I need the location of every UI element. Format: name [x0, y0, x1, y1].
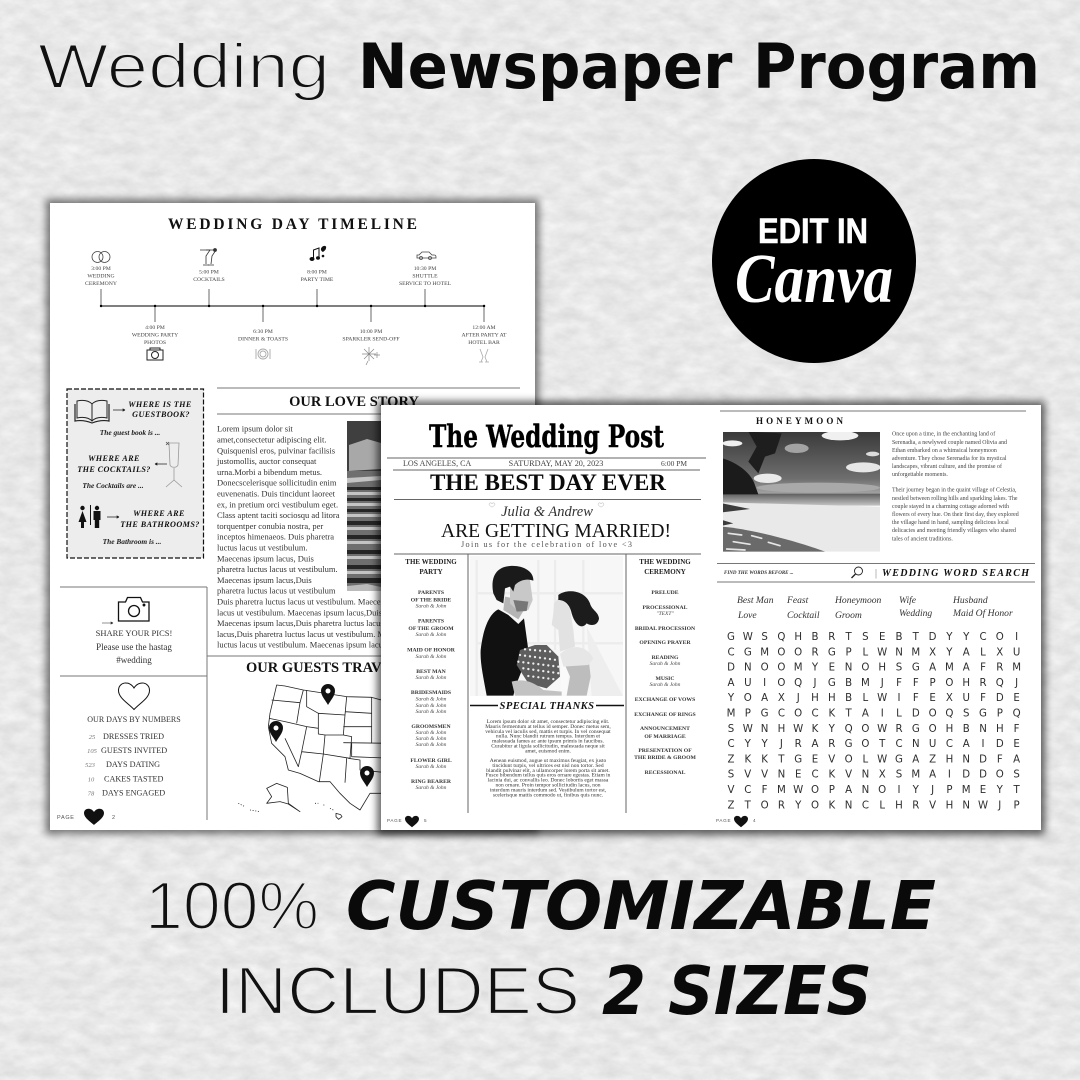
timeline labels top: SERVICE TO HOTEL: [399, 281, 452, 287]
tagline: 100% customizable: CUSTOMIZABLE: [346, 867, 936, 945]
timeline labels bottom: AFTER PARTY AT: [461, 332, 507, 338]
text: honeymoon story: landscapes, vibrant culture, and the promise of: [892, 463, 1002, 470]
word list: Best Man: [737, 595, 774, 606]
text: join us: Join us for the celebration of love <3: [461, 540, 632, 549]
text: special thanks body: Curabitur at ligula sollicitudin, malesuada neque sit: [491, 744, 605, 750]
headline: the best day ever: THE BEST DAY EVER: [430, 470, 667, 496]
column: wedding party: Sarah & John: [416, 654, 447, 660]
arrow: to share: [102, 622, 113, 624]
word search grid: GWSQHBRTSEBTDYYCOI: [727, 632, 1018, 643]
panel: share your pics: [96, 598, 172, 665]
icon: map pin texas: [360, 766, 374, 787]
icon: cocktails: [200, 248, 216, 265]
text: special thanks body: Mauris fermentum at tellus id semper. Donec metus sem,: [485, 723, 611, 730]
text: special thanks body: Lorem ipsum dolor sit amet, consectetur adipiscing elit.: [487, 719, 610, 725]
timeline labels bottom: DINNER & TOASTS: [238, 336, 288, 342]
heading: our love story: OUR LOVE STORY: [289, 394, 419, 410]
panel: left newspaper page: [46, 199, 539, 834]
text: love story body: Maecenas ipsum lacus, Duis: [217, 553, 314, 563]
column: wedding ceremony: THE BRIDE & GROOM: [634, 755, 697, 761]
heading: wedding day timeline: WEDDING DAY TIMELINE: [168, 216, 417, 233]
timeline labels top: SHUTTLE: [412, 274, 438, 280]
timeline labels top: CEREMONY: [85, 281, 117, 287]
footer: page 2: [57, 809, 116, 825]
column: wedding ceremony: OPENING PRAYER: [639, 640, 691, 646]
word search grid: SWNHWKYQOWRGOHBNHF: [728, 724, 1020, 735]
column: wedding ceremony: BRIDAL PROCESSION: [635, 626, 696, 632]
word search grid: VCFMWOPANOIYJPMEYT: [728, 785, 1020, 796]
column: wedding party: [405, 558, 457, 791]
timeline labels bottom: HOTEL BAR: [468, 340, 500, 346]
subhead: are getting married: ARE GETTING MARRIED!: [441, 520, 671, 542]
column: wedding ceremony: "TEXT": [656, 611, 674, 617]
footer: page 2: PAGE: [57, 815, 75, 821]
text: honeymoon story: tales of ancient traditions.: [892, 535, 953, 542]
word search grid: ZTORYOKNCLHRVHNWJP: [728, 800, 1020, 811]
text: love story body: amet,consectetur adipiscing elit.: [217, 434, 327, 444]
tagline: includes 2 sizes: INCLUDES: [215, 953, 580, 1029]
text: love story body: Class aptent taciti sociosqu ad litora: [217, 510, 340, 520]
column: wedding ceremony: EXCHANGE OF RINGS: [634, 712, 696, 718]
word list: Wife: [899, 595, 917, 606]
footer: page 5: 5: [424, 818, 427, 823]
text: love story body: [216, 424, 415, 650]
icon: champagne toast: [479, 349, 489, 362]
text: special thanks body: nulla. Nunc blandit rutrum tempus. Interdum et: [496, 734, 601, 740]
column: wedding party: Sarah & John: [416, 730, 447, 736]
tagline: includes 2 sizes: [215, 952, 872, 1030]
map: united states: [238, 684, 393, 819]
word list: Maid Of Honor: [952, 608, 1013, 619]
tagline: 100% customizable: 100%: [145, 868, 319, 944]
timeline labels top: 5:00 PM: [199, 270, 219, 276]
word list: Cocktail: [787, 610, 820, 621]
column: wedding party: PARENTS: [418, 590, 444, 596]
word search grid: CYYJRARGOTCNUCAIDE: [727, 739, 1020, 750]
text: special thanks body: vehicula vel iaculis sed, mattis et turpis. In vel consequat: [485, 729, 611, 735]
column: wedding ceremony: RECESSIONAL: [645, 770, 686, 776]
list: day stats: DAYS ENGAGED: [102, 788, 165, 798]
column: wedding party: RING BEARER: [411, 779, 452, 785]
column: wedding ceremony: THE WEDDING: [639, 558, 691, 566]
icon: music notes: [310, 246, 326, 261]
footer: page 5: PAGE: [387, 818, 402, 823]
column: wedding party: PARENTS: [418, 618, 444, 624]
title: Newspaper Program: [358, 30, 1040, 103]
timeline labels top: 8:00 PM: [307, 270, 327, 276]
column: wedding party: BEST MAN: [416, 669, 447, 675]
panel: right newspaper spread: [377, 401, 1045, 835]
column: wedding party: Sarah & John: [416, 632, 447, 638]
column: wedding ceremony: MUSIC: [656, 676, 674, 682]
footer: page 4: [716, 816, 756, 827]
timeline labels bottom: SPARKLER SEND-OFF: [342, 336, 400, 342]
word list: [737, 595, 1013, 621]
icon: camera: [118, 598, 149, 621]
text: special thanks body: interdum mauris interdum sed. Vestibulum tortor est,: [490, 787, 607, 793]
word search grid: ZKKTGEVOLWGAZHNDFA: [728, 754, 1020, 765]
column: wedding party: Sarah & John: [416, 785, 447, 791]
text: share instructions: Please use the hastag: [96, 642, 172, 652]
icon: champagne flute: [166, 442, 182, 487]
column: wedding party: THE WEDDING: [405, 558, 457, 566]
column: wedding ceremony: PRESENTATION OF: [638, 748, 692, 754]
timeline labels bottom: WEDDING PARTY: [132, 332, 178, 338]
icon: photo camera: [147, 348, 163, 360]
word search grid: SVVNECKVNXSMAIDDOS: [728, 770, 1020, 781]
text: bathrooms question: WHERE ARE: [133, 509, 185, 518]
column: wedding ceremony: EXCHANGE OF VOWS: [635, 697, 695, 703]
icon: restroom figures: [78, 505, 100, 528]
chart: timeline axis and ticks: [101, 289, 484, 322]
panel: where is guide: [67, 389, 204, 558]
text: honeymoon story: Once upon a time, in the enchanting land of: [892, 431, 995, 438]
text: bathrooms question: [103, 509, 200, 546]
timeline labels top: PARTY TIME: [301, 277, 334, 283]
column: wedding ceremony: PRELUDE: [651, 590, 679, 596]
text: cocktails question: THE COCKTAILS?: [77, 465, 151, 474]
word search header: FIND THE WORDS BEFORE ...: [724, 571, 794, 576]
heading: honeymoon: HONEYMOON: [756, 416, 844, 426]
word search grid: [727, 632, 1021, 811]
text: special thanks body: amet, euismod enim.: [525, 748, 572, 754]
arrow: to bathrooms: [107, 516, 119, 518]
column: wedding party: PARTY: [419, 568, 443, 576]
text: bathrooms question: THE BATHROOMS?: [120, 520, 200, 529]
text: cocktails question: The Cocktails are ...: [82, 481, 144, 490]
timeline labels top: WEDDING: [87, 274, 115, 280]
icon: outline heart: [118, 683, 150, 710]
text: honeymoon story: Ethan embarked on a whimsical honeymoon: [892, 448, 997, 454]
text: honeymoon story: [892, 431, 1019, 542]
column: wedding ceremony: OF MARRIAGE: [644, 734, 686, 740]
word search grid: YOAXJHHBLWIFEXUFDE: [727, 693, 1020, 704]
list: day stats: 105: [87, 748, 98, 755]
dateline: LOS ANGELES, CA: [403, 459, 471, 468]
text: love story body: luctus lacus ut vestibulum.: [217, 542, 308, 552]
column: wedding ceremony: CEREMONY: [644, 568, 686, 576]
timeline labels bottom: 12:00 AM: [472, 325, 496, 331]
column: wedding party: Sarah & John: [416, 764, 447, 770]
text: love story body: pharetra luctus lacus ut vestibulum.: [217, 564, 338, 574]
text: guestbook question: [100, 400, 192, 437]
text: honeymoon story: nestled between rolling hills and sparkling lakes. The: [892, 496, 1018, 502]
text: love story body: Duis pharetra luctus lacus ut vestibulum. Maecenas ipsum: [217, 596, 415, 606]
word search grid: DNOOMYENOHSGAMAFRM: [727, 663, 1021, 674]
timeline labels bottom: 10:00 PM: [360, 329, 382, 335]
rule lines: love story and side columns: [60, 388, 520, 820]
text: honeymoon story: adventure. They chose Serenadia for its mystical: [892, 455, 1007, 462]
text: love story body: Donecscelerisque sollicitudin enim: [217, 478, 337, 488]
list: day stats: [85, 732, 167, 798]
icon: map pin california: [269, 721, 283, 742]
column: wedding party: GROOMSMEN: [411, 724, 451, 730]
word list: Love: [737, 610, 757, 621]
text: special thanks body: non ornare. Proin tempor sollicitudin lacus, non: [495, 782, 601, 788]
column: wedding party: Sarah & John: [416, 736, 447, 742]
text: special thanks body: malesuada fames ac ante ipsum primis in faucibus.: [492, 738, 605, 745]
text: special thanks body: [485, 719, 611, 798]
heading: special thanks: SPECIAL THANKS: [499, 701, 595, 712]
text: guestbook question: GUESTBOOK?: [132, 410, 190, 419]
word list: Honeymoon: [834, 595, 882, 606]
word list: Groom: [835, 610, 862, 621]
list: day stats: DRESSES TRIED: [103, 732, 164, 741]
text: bathrooms question: The Bathroom is ...: [103, 537, 162, 546]
word list: Wedding: [899, 608, 932, 619]
text: share instructions: SHARE YOUR PICS!: [96, 628, 172, 638]
icon: shuttle car: [417, 252, 436, 260]
subhead: julia and andrew: Julia & Andrew: [501, 504, 593, 520]
text: love story body: pharetra luctus lacus ut vestibulum: [217, 586, 336, 596]
column: wedding party: OF THE GROOM: [408, 626, 454, 632]
word search grid: CGMOORGPLWNMXYALXU: [727, 647, 1020, 658]
heading: our guests travel: OUR GUESTS TRAVEL: [246, 660, 401, 676]
column: wedding party: BRIDESMAIDS: [411, 690, 451, 696]
icon: magnifier: [852, 567, 862, 578]
text: love story body: Quisquenisl eros, pulvinar facilisis: [217, 445, 335, 455]
word search grid: AUIOQJGBMJFFPOHRQJ: [728, 678, 1018, 689]
badge: edit in canva: EDIT IN: [758, 212, 868, 251]
word search header: |: [875, 568, 877, 579]
title: [38, 30, 1040, 103]
timeline labels bottom: PHOTOS: [144, 340, 166, 346]
text: special thanks body: blandit pulvinar elit, a ullamcorper lorem porta sit amet.: [486, 768, 610, 774]
text: love story body: Maecenas ipsum lacus,Duis pharetra luctus lacus ut: [217, 618, 393, 628]
rule lines: masthead: [387, 458, 706, 813]
text: share instructions: #wedding: [116, 655, 152, 665]
word search grid: MPGCOCKTAILDOQSGPQ: [727, 708, 1021, 720]
column: wedding ceremony: ANNOUNCEMENT: [640, 726, 690, 732]
text: love story body: ex, in pretium orci vestibulum eget.: [217, 499, 338, 509]
column: wedding ceremony: PROCESSIONAL: [643, 605, 688, 611]
text: honeymoon story: unforgettable moments.: [892, 471, 948, 478]
dateline: 6:00 PM: [661, 459, 687, 468]
text: love story body: inceptos himenaeos. Duis pharetra: [217, 532, 334, 542]
text: love story body: Maecenas ipsum lacus,Duis: [217, 575, 312, 585]
word search header: [724, 567, 1030, 579]
icon: sparkler fireworks: [362, 347, 380, 365]
column: wedding party: Sarah & John: [416, 604, 447, 610]
text: special thanks body: lacinia dui, ac convallis leo. Donec lobortis eget massa: [488, 778, 609, 784]
text: love story body: torquentper conubia nostra, per: [217, 521, 323, 531]
text: love story body: euvenenatis. Duis tincidunt laoreet: [217, 488, 336, 498]
text: love story body: lacus ut vestibulum. Maecenas ipsum lacus,Duis pharetra: [217, 607, 412, 617]
rule lines: honeymoon and word search: [717, 411, 1035, 582]
text: love story body: Lorem ipsum dolor sit: [217, 424, 293, 434]
text: honeymoon story: the village hand in hand, sampling delicious local: [892, 520, 1009, 526]
badge: edit in canva: [712, 159, 916, 363]
column: wedding party: FLOWER GIRL: [410, 758, 452, 764]
timeline labels bottom: [132, 325, 507, 346]
text: cocktails question: WHERE ARE: [88, 454, 140, 463]
column: wedding ceremony: READING: [652, 655, 679, 661]
timeline labels top: 10:30 PM: [414, 266, 436, 272]
masthead: the wedding post: The Wedding Post: [429, 419, 665, 455]
list: day stats: CAKES TASTED: [104, 774, 164, 784]
text: special thanks body: Fusce bibendum tellus quis eros ornare egestas. Etiam in: [486, 773, 611, 779]
list: day stats: 523: [85, 762, 96, 769]
column: wedding ceremony: [634, 558, 697, 776]
list: day stats: DAYS DATING: [106, 760, 160, 769]
text: love story body: justomollis, auctor consequat: [216, 456, 317, 466]
footer: page 2: 2: [112, 815, 116, 821]
text: guestbook question: The guest book is ...: [100, 428, 160, 437]
timeline labels bottom: 4:00 PM: [145, 325, 165, 331]
text: honeymoon story: delicacies and meeting friendly villagers who shared: [892, 527, 1016, 534]
title: Wedding: [38, 32, 330, 102]
text: love story body: luctus lacus ut vestibulum. Maecenas ipsum lacus,Duis: [217, 640, 404, 650]
list: day stats: GUESTS INVITED: [101, 746, 167, 755]
timeline labels top: [85, 266, 452, 287]
arrow: to guestbook: [113, 409, 125, 411]
text: love story body: lacus,Duis pharetra luctus lacus ut vestibulum. Maecenas: [217, 629, 412, 639]
footer: page 4: PAGE: [716, 818, 731, 823]
text: honeymoon story: Serenadia, a newlywed couple named Olivia and: [892, 440, 1007, 446]
text: numbers heading: OUR DAYS BY NUMBERS: [87, 715, 181, 724]
icon: map pin montana: [321, 684, 335, 705]
text: honeymoon story: flowers of every hue. On their first day, they explored: [892, 511, 1019, 518]
word search header: WEDDING WORD SEARCH: [882, 568, 1030, 579]
list: day stats: 78: [88, 790, 95, 798]
text: honeymoon story: Their journey began in the quaint village of Celestia,: [892, 487, 1017, 494]
word list: Feast: [786, 595, 809, 606]
tagline: includes 2 sizes: 2 SIZES: [602, 952, 872, 1030]
dateline: SATURDAY, MAY 20, 2023: [509, 459, 603, 468]
timeline labels top: COCKTAILS: [193, 277, 225, 283]
text: guestbook question: WHERE IS THE: [128, 400, 192, 409]
photo: stone steps: [347, 421, 381, 591]
column: wedding party: Sarah & John: [416, 703, 447, 709]
text: share instructions: [96, 628, 172, 665]
badge: edit in canva: Canva: [735, 241, 893, 318]
column: wedding party: MAID OF HONOR: [407, 648, 456, 654]
icon: dinner plate: [256, 349, 270, 359]
dateline: [403, 459, 687, 468]
photo: beach: [722, 431, 881, 552]
column: wedding party: Sarah & John: [416, 709, 447, 715]
text: love story body: urna.Morbi a bibendum metus.: [217, 467, 322, 477]
panel: our days by numbers: [85, 683, 181, 798]
column: wedding party: Sarah & John: [416, 742, 447, 748]
list: day stats: 10: [88, 776, 95, 784]
word list: Husband: [952, 595, 988, 606]
text: special thanks body: tincidunt turpis, vel ultrices est nisl non tortor. Sed: [492, 763, 604, 769]
column: wedding party: OF THE BRIDE: [411, 598, 451, 604]
column: wedding party: Sarah & John: [416, 675, 447, 681]
timeline labels bottom: 6:30 PM: [253, 329, 273, 335]
footer: page 4: 4: [753, 818, 756, 823]
column: wedding ceremony: Sarah & John: [650, 661, 681, 667]
photo: bride and groom: [470, 556, 623, 697]
icon: open book: [75, 400, 109, 423]
text: special thanks body: scelerisque mattis commodo ut, finibus quis nunc.: [493, 791, 604, 798]
list: day stats: 25: [89, 734, 96, 741]
text: special thanks body: Aenean euismod, augue ut maximus feugiat, ex justo: [490, 757, 607, 764]
arrow: to cocktails: [155, 463, 167, 465]
column: wedding party: Sarah & John: [416, 696, 447, 702]
icon: rings: [92, 252, 110, 262]
column: wedding ceremony: Sarah & John: [650, 682, 681, 688]
footer: page 5: [387, 816, 427, 827]
text: honeymoon story: couple stayed in a charming cottage adorned with: [892, 504, 1009, 510]
text: cocktails question: [77, 454, 151, 490]
timeline labels top: 3:00 PM: [91, 266, 111, 272]
